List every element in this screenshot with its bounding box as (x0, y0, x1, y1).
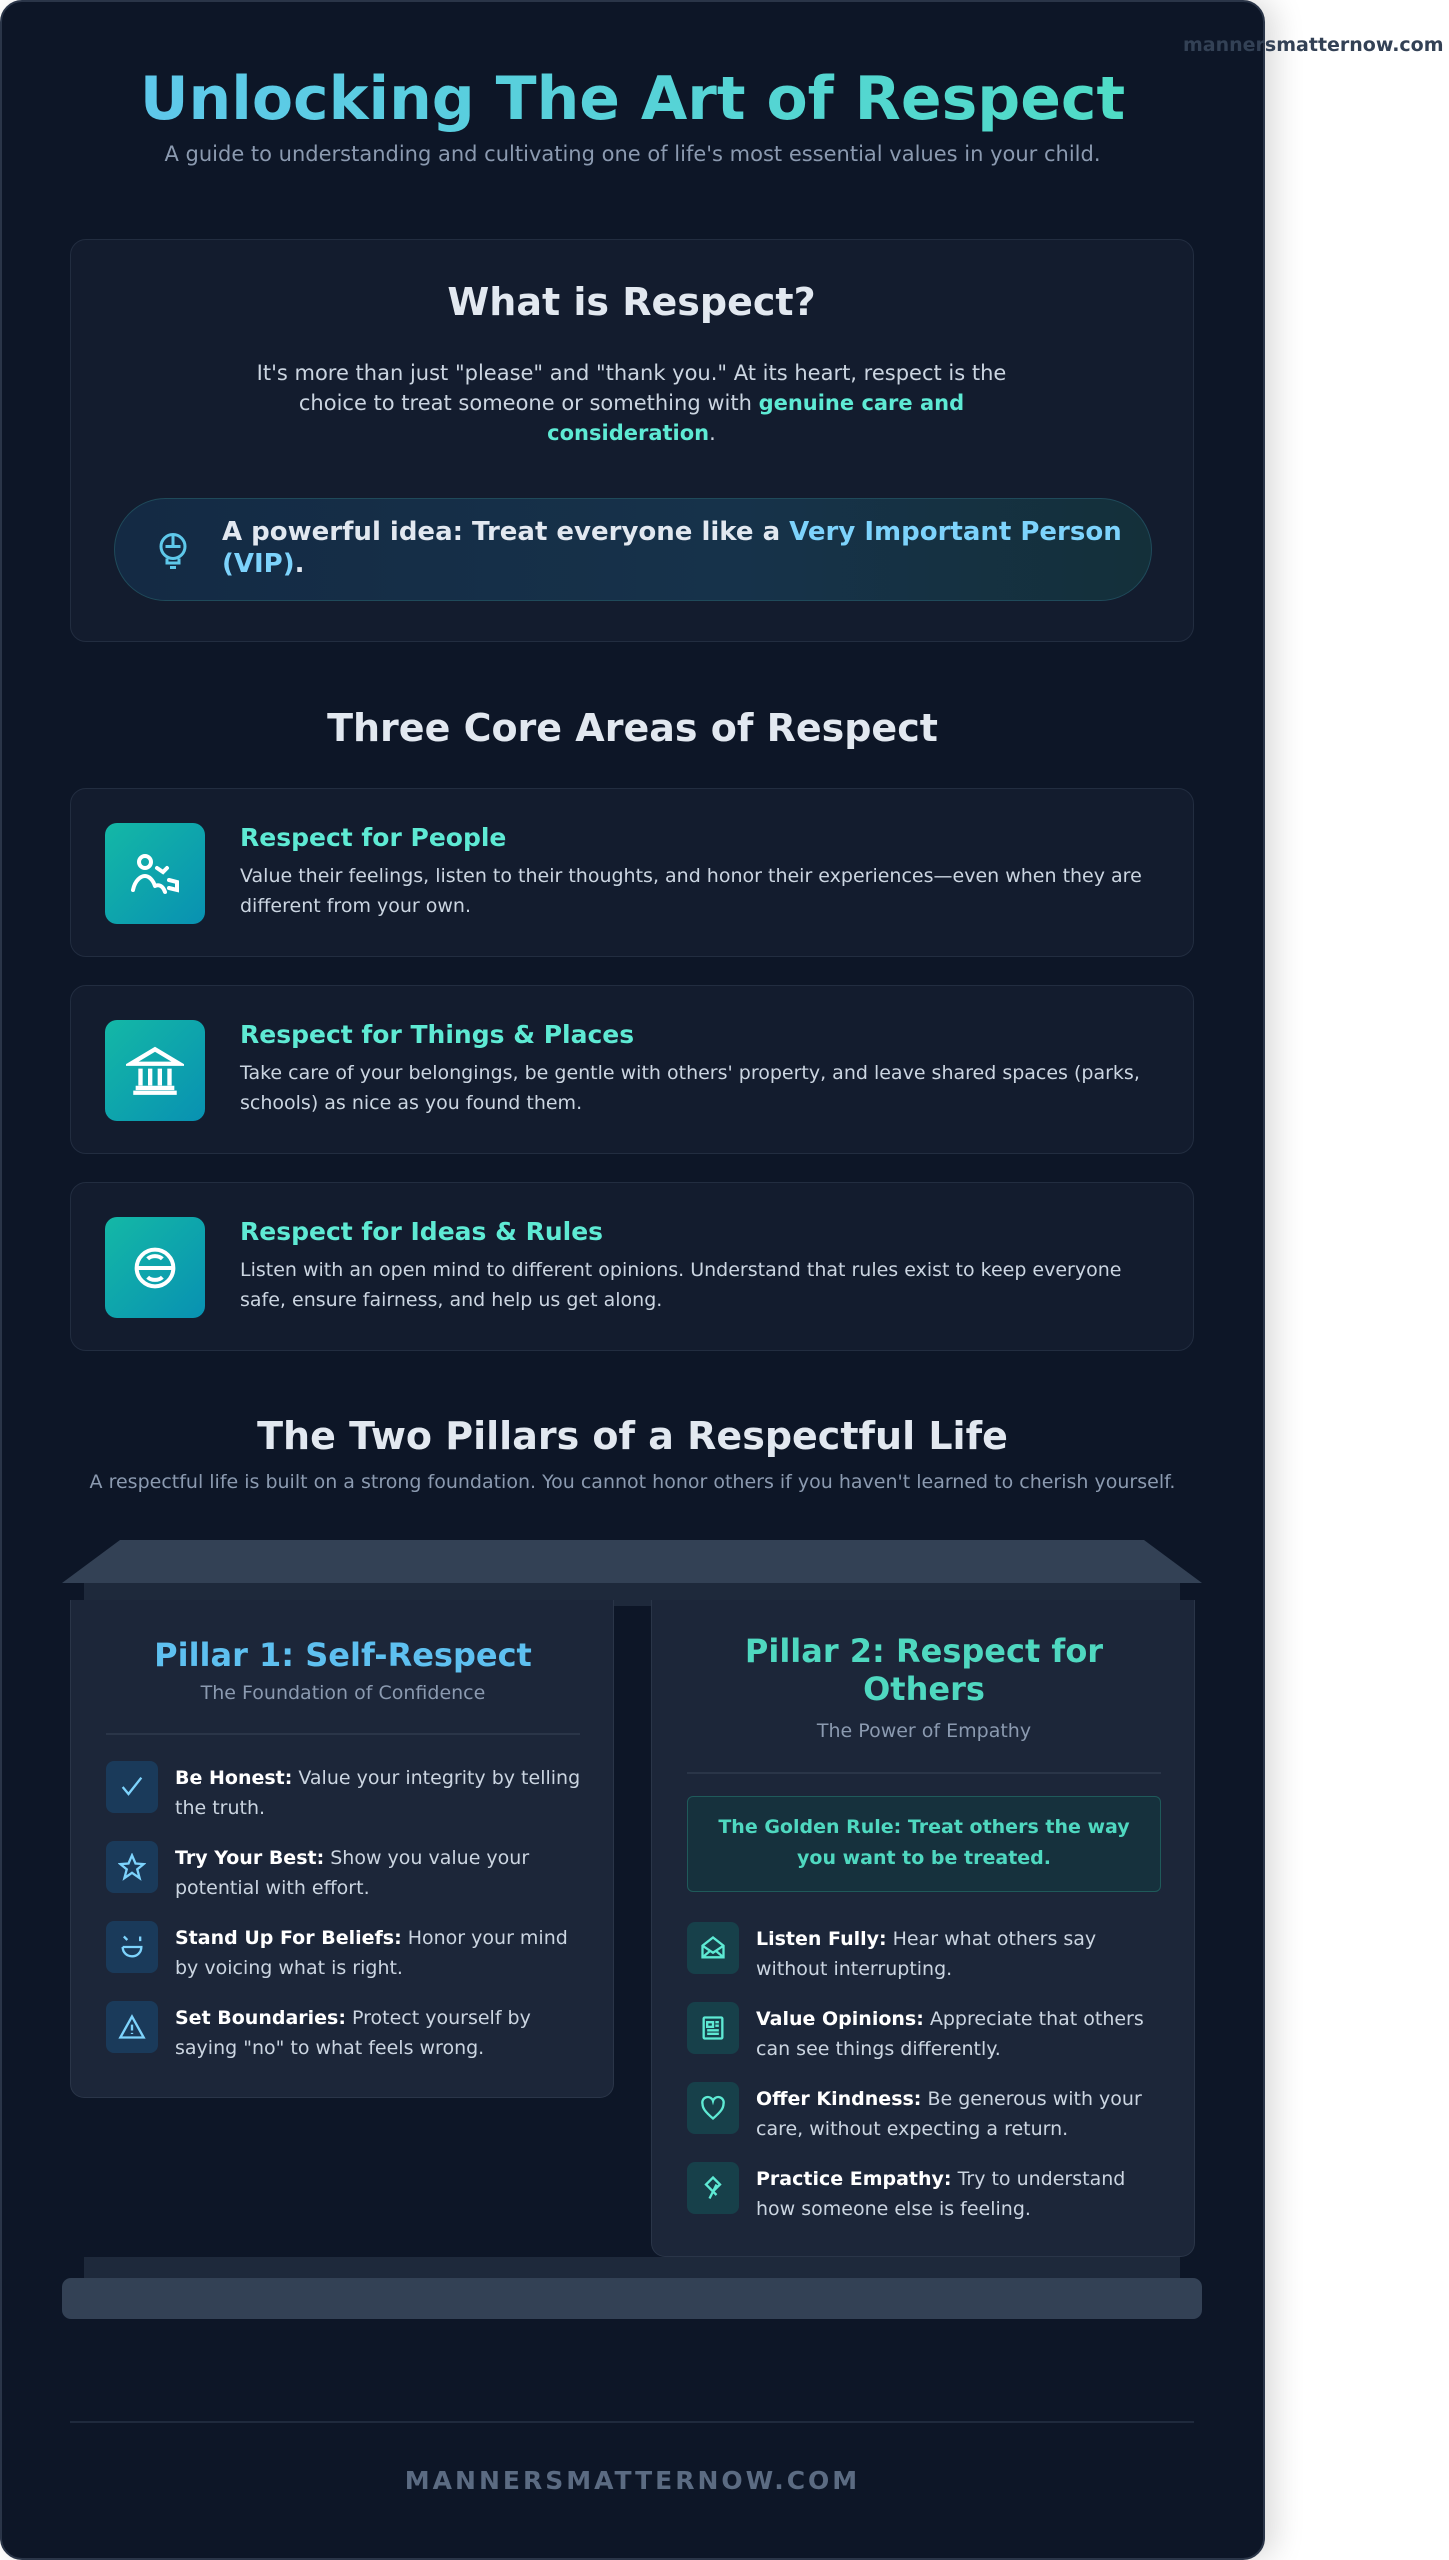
icon: ideas (105, 1217, 205, 1318)
item: listen: Listen Fully: Hear what others say without interrupting. (756, 1928, 1096, 1980)
title: Pillar 2: Respect for Others (745, 1632, 1103, 1708)
pillar 1: self-respect (70, 1600, 614, 2098)
card: things & places (70, 985, 1194, 1154)
heading: two pillars: The Two Pillars of a Respectful Life (257, 1414, 1008, 1458)
subtitle: The Foundation of Confidence (201, 1682, 485, 1704)
title: Respect for Ideas & Rules (240, 1217, 603, 1246)
item: empathy: Practice Empathy: Try to understand how someone else is feeling. (756, 2168, 1125, 2220)
item: try your best: Try Your Best: Show you value your potential with effort. (175, 1847, 529, 1899)
description: Take care of your belongings, be gentle with others' property, and leave shared spaces (parks, schools) as nice as you found them. (240, 1062, 1140, 1114)
panel: what is respect (70, 239, 1194, 642)
text: definition: It's more than just "please" and "thank you." At its heart, respect is the choice to treat someone or something with genuine care and consideration. (257, 361, 1006, 445)
icon: building (105, 1020, 205, 1121)
title: Unlocking The Art of Respect (140, 64, 1125, 134)
title: Respect for People (240, 823, 506, 852)
roof (62, 1540, 1202, 1606)
callout: VIP (114, 498, 1152, 601)
item: stand up: Stand Up For Beliefs: Honor your mind by voicing what is right. (175, 1927, 568, 1979)
text: VIP idea: A powerful idea: Treat everyone like a Very Important Person (VIP). (222, 517, 1122, 579)
item: be honest: Be Honest: Value your integrity by telling the truth. (175, 1767, 580, 1819)
watermark: mannersmatternow.com (1183, 34, 1444, 56)
item: opinions: Value Opinions: Appreciate that others can see things differently. (756, 2008, 1144, 2060)
item: kindness: Offer Kindness: Be generous with your care, without expecting a return. (756, 2088, 1142, 2140)
footer: MANNERSMATTERNOW.COM (405, 2466, 860, 2495)
description: Listen with an open mind to different opinions. Understand that rules exist to keep everyone safe, ensure fairness, and help us get along. (240, 1259, 1121, 1311)
title: Pillar 1: Self-Respect (154, 1636, 532, 1674)
card: people (70, 788, 1194, 957)
base (62, 2257, 1202, 2319)
item: boundaries: Set Boundaries: Protect yourself by saying "no" to what feels wrong. (175, 2007, 531, 2059)
heading: three core areas: Three Core Areas of Respect (327, 706, 938, 750)
icon: lightbulb (160, 533, 186, 569)
subtitle: A guide to understanding and cultivating one of life's most essential values in your child. (164, 142, 1101, 166)
subtitle: pillars: A respectful life is built on a strong foundation. You cannot honor others if you haven't learned to cherish yourself. (90, 1471, 1175, 1493)
subtitle: The Power of Empathy (817, 1720, 1031, 1742)
callout: golden rule (687, 1796, 1161, 1892)
heading: what is respect: What is Respect? (447, 280, 816, 324)
description: Value their feelings, listen to their thoughts, and honor their experiences—even when they are different from your own. (240, 865, 1142, 917)
icon: people (105, 823, 205, 924)
title: Respect for Things & Places (240, 1020, 634, 1049)
callout: golden rule: The Golden Rule: Treat others the way you want to be treated. (718, 1816, 1130, 1869)
card: ideas & rules (70, 1182, 1194, 1351)
pillar 2: respect for others (651, 1600, 1195, 2257)
